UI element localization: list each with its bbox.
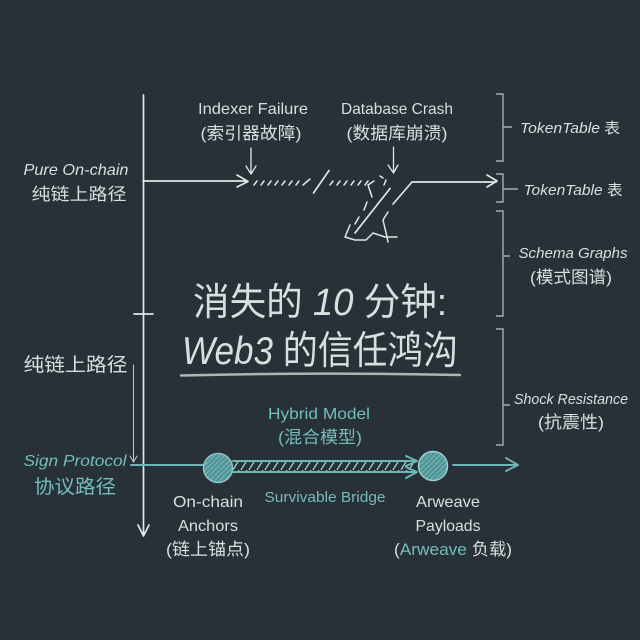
arrow: path resumes to TokenTable bbox=[393, 175, 497, 204]
label: Pure On-chain: Pure On-chain bbox=[24, 162, 129, 179]
bracket: TokenTable 1 bbox=[496, 94, 512, 161]
label: Schema Graphs: Schema Graphs bbox=[518, 245, 628, 262]
label: 纯链上路径: 纯链上路径 bbox=[24, 354, 128, 376]
label: Shock Resistance: (抗震性) bbox=[538, 413, 604, 432]
arrow: pure on-chain path start bbox=[143, 175, 248, 187]
label: Survivable Bridge: Survivable Bridge bbox=[264, 489, 386, 506]
label: Pure On-chain: 纯链上路径 bbox=[32, 185, 126, 204]
bracket: Shock Resistance bbox=[496, 329, 510, 445]
arrow: indexer failure pointer bbox=[246, 148, 256, 174]
label: On-chain Anchors: Anchors bbox=[178, 518, 238, 535]
collapsing crack bbox=[345, 176, 397, 242]
bracket: TokenTable 2 bbox=[496, 174, 518, 202]
label: Sign Protocol bbox=[24, 453, 127, 498]
label: On-chain Anchors bbox=[166, 494, 250, 559]
label: Schema Graphs bbox=[518, 245, 628, 287]
label: Hybrid Model: Hybrid Model bbox=[268, 406, 370, 423]
title bbox=[182, 282, 458, 373]
arrow: onward teal arrow bbox=[453, 458, 518, 471]
label: Hybrid Model: (混合模型) bbox=[278, 428, 362, 447]
arrow: database crash pointer bbox=[388, 147, 398, 173]
label: On-chain Anchors: (链上锚点) bbox=[166, 540, 250, 559]
label: Database Crash: Database Crash bbox=[341, 101, 453, 118]
label: Sign Protocol: Sign Protocol bbox=[24, 453, 127, 470]
bridge: survivable hatched double arrow bbox=[233, 456, 417, 478]
label: On-chain Anchors: On-chain bbox=[173, 494, 243, 511]
label: Indexer Failure bbox=[198, 101, 308, 143]
label: Hybrid Model bbox=[268, 406, 370, 447]
label: Indexer Failure: (索引器故障) bbox=[200, 124, 302, 143]
label: Sign Protocol: 协议路径 bbox=[34, 476, 116, 498]
label: Indexer Failure: Indexer Failure bbox=[198, 101, 308, 118]
title underline bbox=[181, 374, 460, 376]
label: Arweave Payloads: Payloads bbox=[416, 518, 480, 535]
bracket: Schema Graphs bbox=[496, 211, 510, 316]
node: on-chain anchor bbox=[204, 454, 232, 482]
label: Schema Graphs: (模式图谱) bbox=[530, 268, 612, 287]
label: Pure On-chain bbox=[24, 162, 129, 204]
label: Arweave Payloads bbox=[394, 494, 512, 559]
thin arrow down to Sign Protocol bbox=[130, 365, 137, 462]
broken hatched path bbox=[254, 170, 368, 193]
label: Arweave Payloads: Arweave bbox=[416, 494, 480, 511]
title: Web3 的信任鸿沟 bbox=[182, 330, 458, 373]
node: Arweave payload bbox=[418, 452, 448, 480]
teal line from Sign Protocol to anchor bbox=[131, 464, 203, 466]
vertical timeline axis bbox=[134, 95, 153, 536]
label: Shock Resistance bbox=[514, 391, 628, 432]
label: Arweave Payloads: (Arweave 负载) bbox=[394, 540, 512, 559]
label: Shock Resistance: Shock Resistance bbox=[514, 391, 628, 408]
label: TokenTable 表 1: TokenTable 表 bbox=[520, 120, 620, 137]
title: 消失的 10 分钟: bbox=[193, 282, 447, 324]
label: TokenTable 表 2: TokenTable 表 bbox=[524, 182, 622, 199]
label: Database Crash bbox=[341, 101, 453, 143]
label: Database Crash: (数据库崩溃) bbox=[346, 124, 448, 143]
